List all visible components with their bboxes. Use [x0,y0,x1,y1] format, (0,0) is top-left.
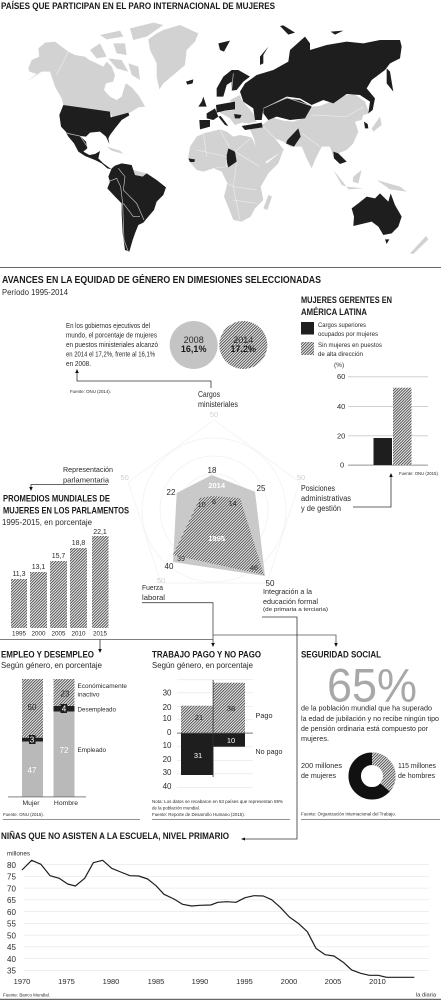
panel: trabajo pago y no pago: 30 [163,768,172,777]
panel: trabajo pago y no pago: Nota: Los datos se recabaron en 63 países que representan 59% [152,799,283,804]
label: posiciones [301,484,351,513]
text block: cargos ministeriales: en 2008. [66,361,91,368]
panel: mujeres gerentes: de alta dirección [318,351,363,358]
bar chart: parlamentos: 2010 [71,630,86,638]
panel: mujeres gerentes: MUJERES GERENTES EN [301,295,392,305]
text block: cargos ministeriales: en 2014 el 17,2%, frente al 16,1% [66,352,155,358]
arrow: posiciones [353,473,393,507]
radar chart: 46 [250,565,258,572]
panel: seguridad social: 65% [327,659,417,712]
panel: niñas que no asisten a la escuela: millones [7,851,31,858]
panel: trabajo pago y no pago: 0 [167,728,172,737]
radar chart: 50 [210,410,218,419]
panel: niñas que no asisten a la escuela: 2000 [281,977,297,986]
divider [0,267,441,268]
panel: seguridad social: de hombres [398,771,435,780]
panel: trabajo pago y no pago: 38 [227,704,235,713]
panel: niñas que no asisten a la escuela: 80 [7,861,16,870]
bar chart: parlamentos: 15,7 [52,553,65,560]
bar chart: parlamentos: 2015 [93,630,107,638]
panel: trabajo pago y no pago: No pago [256,747,282,756]
radar chart: 50 [297,473,305,482]
panel: trabajo pago y no pago: 10 [163,714,172,723]
panel: empleo y desempleo: Económicamente [78,683,127,690]
radar chart: 39 [177,556,185,563]
radar chart: 50 [266,579,275,588]
panel: niñas que no asisten a la escuela: NIÑAS QUE NO ASISTEN A LA ESCUELA, NIVEL PRIMARIO [1,831,229,841]
title: map heading: PAÍSES QUE PARTICIPAN EN EL PARO INTERNACIONAL DE MUJERES [1,1,275,12]
heading: parlamentos: MUJERES EN LOS PARLAMENTOS [3,506,129,516]
label: cargos ministeriales: Cargos [198,390,220,399]
panel: niñas que no asisten a la escuela: 1995 [236,977,253,986]
panel: empleo y desempleo: Desempleado [78,707,116,714]
bottom rule [0,999,441,1000]
label: fuerza laboral: laboral [142,593,165,602]
panel: mujeres gerentes [301,295,439,476]
panel: empleo y desempleo: Según género, en porcentaje [1,661,103,670]
panel: niñas que no asisten a la escuela: 40 [7,955,16,964]
panel: mujeres gerentes: ocupados por mujeres [318,331,379,338]
heading: avances: Período 1995-2014 [2,287,68,297]
panel: empleo y desempleo: 50 [28,703,37,712]
panel: empleo y desempleo: 3 [30,736,35,744]
panel: empleo y desempleo: Mujer [22,800,40,807]
panel: niñas que no asisten a la escuela: 2005 [325,977,341,986]
circle: 2008: 16,1% [181,344,206,354]
panel: trabajo pago y no pago: 20 [163,703,172,712]
panel: niñas que no asisten a la escuela: 1970 [14,977,30,986]
bar chart: parlamentos: 11,3 [12,571,26,578]
bar chart: parlamentos: 2000 [31,630,46,638]
panel: mujeres gerentes: 20 [337,432,345,440]
panel: seguridad social: de la población mundial que ha superado [301,704,432,713]
panel: mujeres gerentes: Cargos superiores [318,322,367,329]
panel: niñas que no asisten a la escuela: 55 [7,920,16,928]
panel: trabajo pago y no pago: 21 [195,713,203,722]
bar chart: parlamentos: 22,1 [93,529,107,536]
radar chart: 40 [165,562,174,571]
panel: niñas que no asisten a la escuela: la diaria [416,993,437,999]
label: integración: educación formal [263,597,318,606]
panel: trabajo pago y no pago: 20 [163,755,172,764]
radar chart [121,410,305,588]
label: fuerza laboral [142,583,165,602]
panel: trabajo pago y no pago: 31 [194,751,202,760]
panel: seguridad social: mujeres. [301,734,329,743]
heading: avances [2,273,321,297]
circle: 2008: 2008 [184,335,204,345]
label: integración: Integración a la [263,587,313,596]
circle: 2014 [219,321,267,369]
panel: seguridad social: de pensión ordinaria está compuesto por [301,724,428,733]
panel: trabajo pago y no pago: 10 [163,741,172,750]
panel: trabajo pago y no pago: 10 [227,736,235,745]
panel: seguridad social: Fuente: Organización Internacional del Trabajo. [301,812,396,817]
arrow: representación [29,484,108,491]
panel: trabajo pago y no pago: 30 [163,688,172,698]
label: representación parlamentaria: Representación [63,465,113,474]
panel: empleo y desempleo: 72 [60,746,69,755]
bar chart: parlamentos [11,529,108,638]
panel: niñas que no asisten a la escuela: Fuente: Banco Mundial. [3,993,50,998]
panel: niñas que no asisten a la escuela: 2010 [369,977,386,986]
panel: niñas que no asisten a la escuela: 1985 [148,977,164,986]
panel: seguridad social: SEGURIDAD SOCIAL [301,650,381,660]
radar chart: 14 [229,501,237,508]
panel: niñas que no asisten a la escuela: 75 [7,872,16,882]
text block: cargos ministeriales [66,323,158,368]
panel: trabajo pago y no pago: Fuente: Reporte de Desarrollo Humano (2015). [152,812,245,817]
panel: trabajo pago y no pago: de la población mundial. [152,806,200,810]
circle: 2014: 17,2% [231,344,256,354]
heading: parlamentos: 1995-2015, en porcentaje [2,518,93,527]
panel: niñas que no asisten a la escuela: 35 [7,966,16,976]
panel: seguridad social: 115 millones [398,761,436,770]
panel: empleo y desempleo [1,650,140,820]
panel: mujeres gerentes: 40 [337,402,345,411]
text block: cargos ministeriales: mundo, el porcentaje de mujeres [66,332,157,340]
world map [27,23,428,254]
panel: trabajo pago y no pago: TRABAJO PAGO Y NO PAGO [152,650,261,660]
radar chart: 10 [198,502,206,509]
label: integración [263,587,328,613]
panel: seguridad social: 200 millones [301,761,342,770]
bar chart: parlamentos: 18,8 [72,540,85,547]
panel: niñas que no asisten a la escuela: 1990 [192,977,208,986]
arrow: cargos ministeriales [75,369,211,388]
bar chart: parlamentos: 2005 [51,630,66,638]
heading: parlamentos: PROMEDIOS MUNDIALES DE [3,494,110,504]
panel: niñas que no asisten a la escuela: 60 [7,908,16,917]
label: posiciones: y de gestión [301,504,341,513]
panel: empleo y desempleo: Hombre [54,800,78,807]
connectors to lower panels [0,603,338,840]
radar chart: 22 [167,488,176,497]
panel: trabajo pago y no pago: Según género, en porcentaje [152,661,254,670]
bar chart: parlamentos: 13,1 [32,564,45,571]
panel: seguridad social: de mujeres [301,771,336,780]
label: cargos ministeriales: ministeriales [198,400,238,409]
panel: empleo y desempleo: Empleado [78,747,106,754]
panel: trabajo pago y no pago: 40 [163,782,172,791]
panel: empleo y desempleo: EMPLEO Y DESEMPLEO [1,650,94,660]
circle: 2008 [170,321,218,369]
radar chart: 50 [121,473,129,482]
radar chart: 1995 [208,534,225,543]
radar chart: 18 [208,466,217,475]
label: integración: (de primaria a terciaria) [263,607,328,613]
heading: avances: AVANCES EN LA EQUIDAD DE GÉNERO EN DIMESIONES SELECCIONADAS [2,273,321,286]
panel: niñas que no asisten a la escuela: 1975 [58,977,75,986]
panel: niñas que no asisten a la escuela [1,831,437,999]
source: Fuente: ONU (2014). [70,389,111,394]
panel: mujeres gerentes: Sin mujeres en puestos [318,342,383,349]
panel: empleo y desempleo: Fuente: ONU (2015). [3,812,44,817]
panel: niñas que no asisten a la escuela: 50 [7,931,16,940]
label: fuerza laboral: Fuerza [142,583,164,592]
panel: empleo y desempleo: inactivo [78,692,100,698]
label: cargos ministeriales [198,390,238,409]
panel: mujeres gerentes: Fuente: ONU (2015). [399,471,439,476]
panel: niñas que no asisten a la escuela: 70 [7,884,16,894]
panel: trabajo pago y no pago [152,650,290,820]
panel: niñas que no asisten a la escuela: 65 [7,896,16,905]
label: posiciones: administrativas [301,494,351,503]
radar chart: 2014 [208,481,226,490]
panel: niñas que no asisten a la escuela: 1980 [103,977,119,986]
panel: empleo y desempleo: 23 [61,690,70,698]
panel: mujeres gerentes: 0 [340,460,344,470]
panel: empleo y desempleo: 47 [28,766,37,775]
panel: mujeres gerentes: 60 [337,372,345,381]
heading: parlamentos [2,494,129,527]
panel: mujeres gerentes: AMÉRICA LATINA [301,307,367,317]
panel: trabajo pago y no pago: Pago [256,711,272,720]
label: representación parlamentaria [63,465,113,484]
panel: niñas que no asisten a la escuela: 45 [7,943,16,952]
panel: seguridad social [301,650,440,820]
text block: cargos ministeriales: En los gobiernos ejecutivos del [66,323,150,330]
label: posiciones: Posiciones [301,484,335,493]
panel: mujeres gerentes: (%) [334,362,344,369]
radar chart: 6 [212,499,216,506]
label: representación parlamentaria: parlamentaria [63,476,110,484]
radar chart: 50 [157,576,165,585]
panel: empleo y desempleo: 4 [62,704,67,714]
bar chart: parlamentos: 1995 [12,630,26,638]
radar chart: 25 [257,484,266,493]
circle: 2014: 2014 [233,335,253,345]
text block: cargos ministeriales: en puestos ministeriales alcanzó [66,342,158,349]
